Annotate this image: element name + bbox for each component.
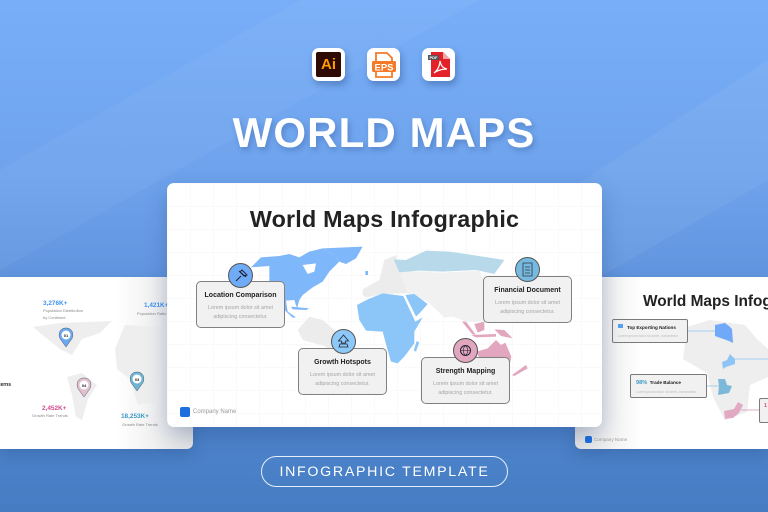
iceland and uk marks: [365, 271, 368, 275]
stats, left slide: 18,253K+: [121, 413, 149, 420]
icon: pin: [228, 263, 253, 288]
madagascar: [414, 341, 419, 352]
callout: top exporting nations: Lorem ipsum dolor sit amet, consectetur.: [618, 334, 679, 338]
new zealand: [512, 365, 528, 376]
pin 04: 04: [82, 383, 87, 388]
russia: [394, 251, 504, 274]
callout: location comparison: Lorem ipsum dolor sit amet: [208, 305, 273, 311]
callout: top exporting nations: Top Exporting Nations: [627, 325, 676, 330]
hudson bay: [303, 263, 316, 274]
world map: [251, 246, 528, 376]
title: WORLD MAPS: [233, 109, 535, 156]
europe: [363, 255, 433, 297]
callout: financial document: Lorem ipsum dolor sit amet: [495, 300, 560, 306]
pin 01: [59, 328, 73, 347]
callout: financial document: Financial Document: [494, 287, 561, 294]
icon: EPS: EPS: [374, 62, 394, 74]
pin 03: [130, 372, 144, 391]
callout: financial document: [483, 276, 572, 323]
java: [471, 334, 496, 337]
footer text: Company Name: [594, 437, 627, 442]
callout: location comparison: [196, 281, 285, 328]
callout: partial: 1: [764, 403, 767, 409]
main slide heading: World Maps Infographic: [250, 206, 519, 232]
stats, left slide: Growth Rate Trends: [122, 422, 158, 427]
stats, left slide: 3,276K+: [43, 300, 68, 307]
footer logo: [180, 407, 190, 417]
world map, left slide: [33, 321, 193, 420]
callout: financial document: adipiscing consectetur.: [500, 309, 555, 315]
pill label: [261, 456, 508, 487]
callout: strength mapping: adipiscing consectetur.: [438, 390, 493, 396]
south america: [298, 317, 339, 353]
callout: trade balance: Lorem ipsum dolor sit amet, consectetur.: [636, 390, 697, 394]
stats, left slide: [0, 300, 169, 427]
australia: [477, 340, 511, 367]
sumatra: [462, 322, 476, 335]
icon: document: [515, 257, 540, 282]
pin 03: 03: [135, 377, 140, 382]
footer text: Company Name: [193, 409, 236, 415]
icon: growth: [331, 329, 356, 354]
stats, left slide: 2,452K+: [42, 405, 67, 412]
icon: EPS: [367, 48, 400, 81]
callout: partial: [759, 398, 768, 423]
callout: strength mapping: Lorem ipsum dolor sit amet: [433, 381, 498, 387]
stats, left slide: by Continent: [43, 315, 66, 320]
icon: flag: [618, 324, 623, 328]
icon: PDF: PDF: [430, 55, 438, 60]
callout: location comparison: Location Comparison: [205, 292, 276, 299]
callout: strength mapping: [421, 357, 510, 404]
callout: trade balance: 98% Trade Balance: [636, 380, 681, 386]
footer logo: [585, 436, 592, 443]
icon: Illustrator: Ai: [321, 56, 336, 73]
borneo: [474, 322, 484, 333]
icon: Illustrator: [312, 48, 345, 81]
callout: growth hotspots: adipiscing consectetur.: [315, 381, 370, 387]
icon: PDF: [422, 48, 455, 81]
icon: globe: [453, 338, 478, 363]
slide heading: World Maps Infog: [643, 293, 768, 310]
north america: [251, 248, 339, 318]
callout: top exporting nations: [612, 319, 688, 343]
panel: left slide: [0, 277, 193, 449]
callout: location comparison: adipiscing consectetur.: [213, 314, 268, 320]
panel: main slide: [167, 183, 602, 427]
stats, left slide: Growth Rate Trends: [32, 413, 68, 418]
pin 01: 01: [64, 333, 69, 338]
pill label: INFOGRAPHIC TEMPLATE: [279, 464, 490, 480]
asia: [399, 271, 488, 322]
pin 04: [77, 378, 91, 397]
callout: trade balance: [630, 374, 707, 398]
africa: [357, 293, 423, 363]
callout: growth hotspots: [298, 348, 387, 395]
new guinea: [494, 329, 513, 338]
callout: growth hotspots: Growth Hotspots: [314, 359, 371, 366]
arabia: [405, 294, 428, 317]
caribbean: [291, 307, 309, 310]
africa map: [683, 320, 768, 420]
callout: growth hotspots: Lorem ipsum dolor sit amet: [310, 372, 375, 378]
stats, left slide: Population Ratio: [137, 311, 167, 316]
panel: right slide: [575, 277, 768, 449]
greenland: [323, 247, 363, 264]
stats, left slide: Population Distribution: [43, 308, 83, 313]
callout: strength mapping: Strength Mapping: [436, 368, 495, 375]
stats, left slide: 1,421K+: [144, 302, 169, 309]
